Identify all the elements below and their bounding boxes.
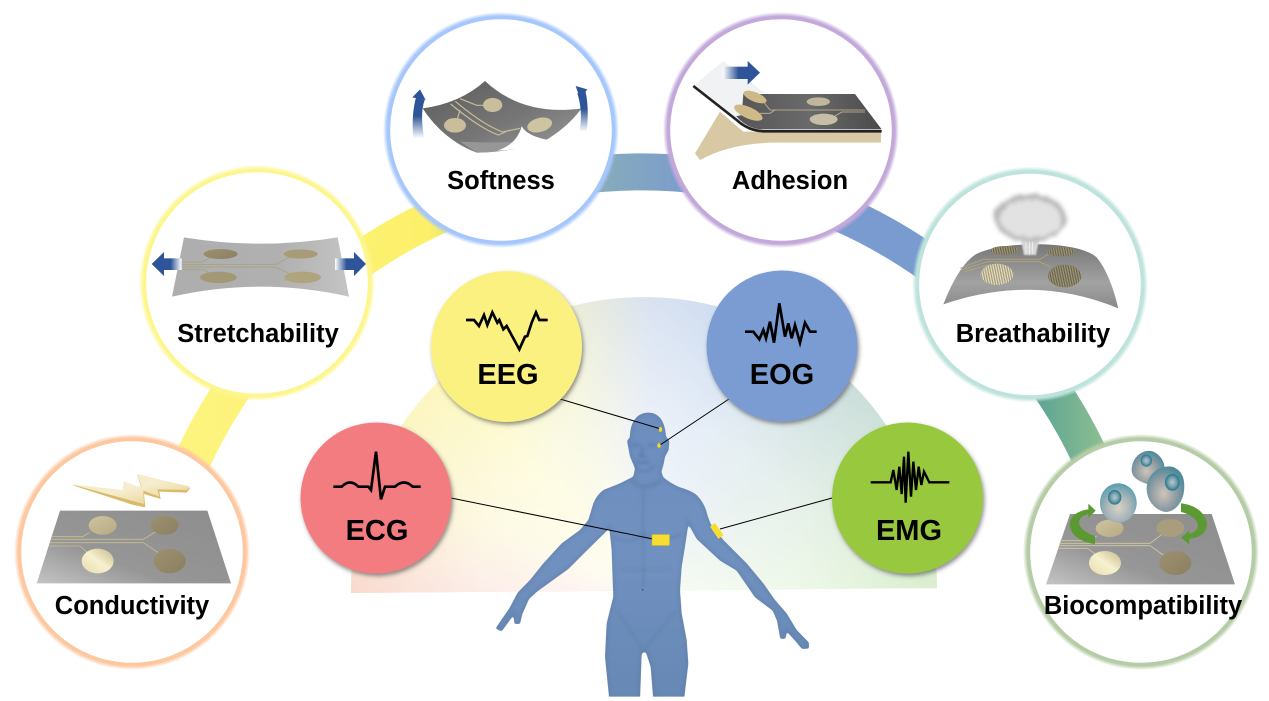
icon: stretched electrode sheet with arrows (152, 237, 366, 297)
icon: electrode sheet with lightning bolt (37, 474, 231, 583)
label: Biocompatibility: Biocompatibility (1044, 592, 1243, 620)
connector line: EOG to eye (660, 399, 729, 445)
icon: breathable sheet with vapor cloud (943, 194, 1118, 308)
badge: EMG (832, 422, 983, 574)
human body figure (495, 413, 809, 700)
label: Adhesion: Adhesion (732, 167, 848, 195)
panel: breathability (912, 166, 1148, 402)
panel: stretchability (139, 165, 375, 401)
badge: EEG (431, 271, 582, 422)
sensor: forehead electrode (659, 427, 662, 432)
sensor: chest patch (652, 534, 670, 546)
icon: electrode sheet with cells (1046, 451, 1235, 584)
label: ECG: ECG (346, 515, 408, 547)
waveform: EOG (745, 303, 817, 343)
icon: peeling adhesive sheet with arrow (693, 61, 882, 160)
label: Conductivity: Conductivity (55, 592, 210, 620)
panel: adhesion (663, 12, 899, 248)
panel: softness (383, 12, 619, 248)
badge: ECG (300, 422, 452, 574)
waveform: ECG (333, 452, 421, 499)
label: Breathability: Breathability (956, 320, 1111, 348)
panel: biocompatibility (1023, 434, 1259, 670)
connector line: EMG to arm (720, 498, 832, 529)
icon: vapor plume (994, 194, 1066, 255)
label: Softness: Softness (447, 167, 555, 195)
badge: EOG (706, 270, 858, 422)
sensor: arm patch (710, 523, 724, 539)
sensor: eye electrode (657, 443, 661, 448)
icon: flexible curled sheet with arrows (412, 81, 588, 153)
background dome gradient (351, 296, 937, 593)
label: EEG: EEG (477, 359, 539, 391)
label: EMG: EMG (876, 515, 942, 547)
label: Stretchability: Stretchability (177, 320, 340, 348)
panel: conductivity (14, 434, 250, 670)
waveform: EEG (466, 312, 548, 349)
label: EOG: EOG (750, 359, 814, 391)
body muscle shading (495, 413, 809, 700)
connecting arc band (180, 172, 1104, 490)
waveform: EMG (871, 452, 949, 503)
connector line: EEG to forehead (560, 399, 661, 429)
connector line: ECG to chest (451, 498, 653, 539)
